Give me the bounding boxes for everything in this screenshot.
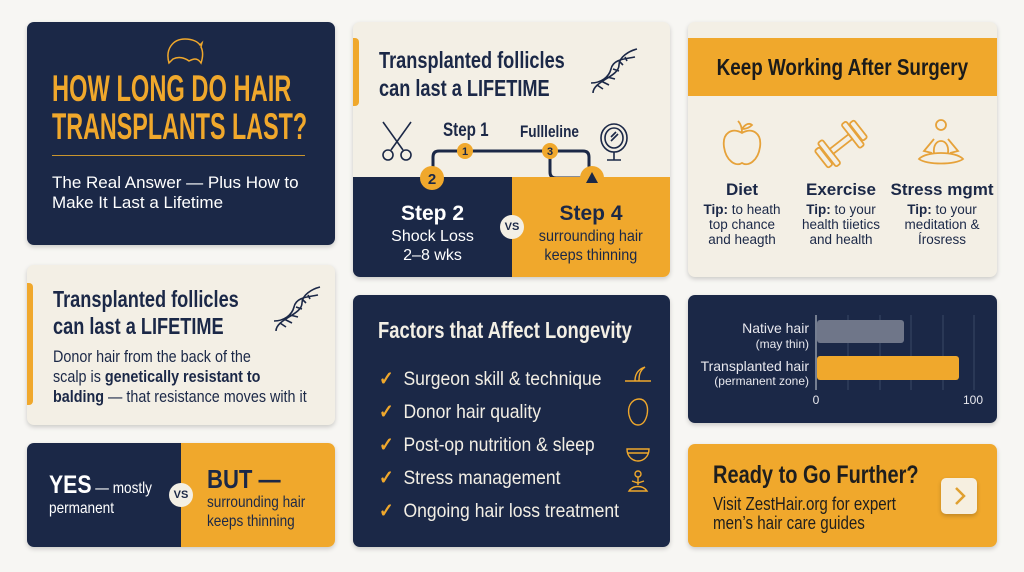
heading: can last a LIFETIME <box>53 313 224 339</box>
item: stress: meditation & <box>904 217 980 232</box>
panel: bar chart: Transplanted hair <box>701 358 809 374</box>
panel: steps timeline: Fullleline <box>520 122 579 141</box>
step labels: Step 1 <box>443 120 489 141</box>
item: stress <box>890 180 994 247</box>
item: exercise <box>802 180 880 247</box>
panel: cta <box>688 444 997 547</box>
panel: keep working <box>688 22 997 277</box>
item: exercise: health tiietics <box>802 217 880 232</box>
body text: scalp is genetically resistant to <box>53 368 260 386</box>
panel: lifetime follicles <box>27 265 335 425</box>
panel: title: TRANSPLANTS LAST? <box>52 106 307 147</box>
panel: title <box>27 22 335 245</box>
bottom split <box>353 177 670 277</box>
item: diet: top chance <box>709 217 775 232</box>
text: but: surrounding hair <box>207 494 305 511</box>
item: diet: Diet <box>726 180 758 199</box>
heading: Transplanted follicles <box>379 47 565 73</box>
heading <box>53 286 239 339</box>
body text: balding — that resistance moves with it <box>53 388 307 406</box>
checklist: ✓ Stress management <box>379 467 561 489</box>
body text <box>53 348 307 406</box>
checklist <box>379 368 619 522</box>
step 2 <box>391 202 474 264</box>
text: but: BUT — <box>207 464 281 494</box>
panel: bar chart <box>688 295 997 423</box>
checklist: ✓ Ongoing hair loss treatment <box>379 500 619 522</box>
timeline: 1 <box>462 146 468 158</box>
checklist: ✓ Post-op nutrition & sleep <box>379 434 595 456</box>
vs badge: VS <box>505 221 519 233</box>
panel: keep working: Keep Working After Surgery <box>717 54 968 80</box>
step 2: 2–8 wks <box>403 247 462 264</box>
panel: bar chart: (may thin) <box>756 337 809 351</box>
icon: dna <box>274 286 320 331</box>
vs badge <box>169 483 193 507</box>
checklist: ✓ Donor hair quality <box>379 401 541 423</box>
panel: steps timeline <box>353 22 670 277</box>
item: stress: Stress mgmt <box>890 180 993 199</box>
icon: mirror <box>600 123 628 161</box>
step 2: Step 2 <box>401 202 464 225</box>
item: stress: Tip: to your <box>907 202 977 217</box>
panel: steps timeline: 2 <box>428 171 436 188</box>
icons <box>625 366 651 492</box>
item: stress: Írosress <box>918 232 966 247</box>
item: exercise: Tip: to your <box>806 202 876 217</box>
panel: factors <box>353 295 670 547</box>
vs badge: VS <box>174 489 188 501</box>
text: yes: YES — mostly <box>49 471 152 499</box>
vs badge <box>500 215 524 239</box>
icons <box>722 119 964 168</box>
icon: hair <box>167 38 204 65</box>
panel: bar chart: 0 <box>813 393 820 407</box>
panel: yes vs but <box>27 443 335 547</box>
button <box>941 478 977 514</box>
heading: Ready to Go Further? <box>713 461 919 489</box>
text: Visit ZestHair.org for expert <box>713 494 896 514</box>
heading band <box>688 38 997 96</box>
timeline <box>432 143 590 177</box>
icon: scissors <box>382 122 412 161</box>
heading: HOW LONG DO HAIR <box>52 68 291 109</box>
step 4 <box>539 202 643 264</box>
step 4: Step 4 <box>559 202 623 225</box>
panel: bar chart: 100 <box>963 393 983 407</box>
item: exercise: and health <box>809 232 873 247</box>
timeline: 3 <box>547 146 553 158</box>
text: men’s hair care guides <box>713 513 865 533</box>
checklist: ✓ Surgeon skill & technique <box>379 368 602 390</box>
step 2: Shock Loss <box>391 228 474 245</box>
subtitle: Make It Last a Lifetime <box>52 193 223 212</box>
icon: dna <box>591 48 638 93</box>
text: yes: permanent <box>49 500 114 517</box>
bars <box>817 320 904 343</box>
text: yes <box>49 471 152 517</box>
heading: Factors that Affect Longevity <box>378 317 632 343</box>
body text: Donor hair from the back of the <box>53 348 251 366</box>
heading <box>379 47 565 101</box>
subtitle: The Real Answer — Plus How to <box>52 173 299 192</box>
step 4: surrounding hair <box>539 228 643 245</box>
heading: can last a LIFETIME <box>379 75 550 101</box>
item: diet: and heagth <box>708 232 776 247</box>
text: but: keeps thinning <box>207 513 295 530</box>
panel: bar chart: Native hair <box>742 320 809 336</box>
subtitle <box>52 173 299 212</box>
panel: bar chart: (permanent zone) <box>714 374 809 388</box>
item: diet: Tip: to heath <box>703 202 781 217</box>
item: exercise: Exercise <box>806 180 876 199</box>
heading: Transplanted follicles <box>53 286 239 312</box>
text: but <box>207 464 306 530</box>
text <box>713 494 896 533</box>
item: diet <box>703 180 781 247</box>
step 4: keeps thinning <box>545 247 637 264</box>
